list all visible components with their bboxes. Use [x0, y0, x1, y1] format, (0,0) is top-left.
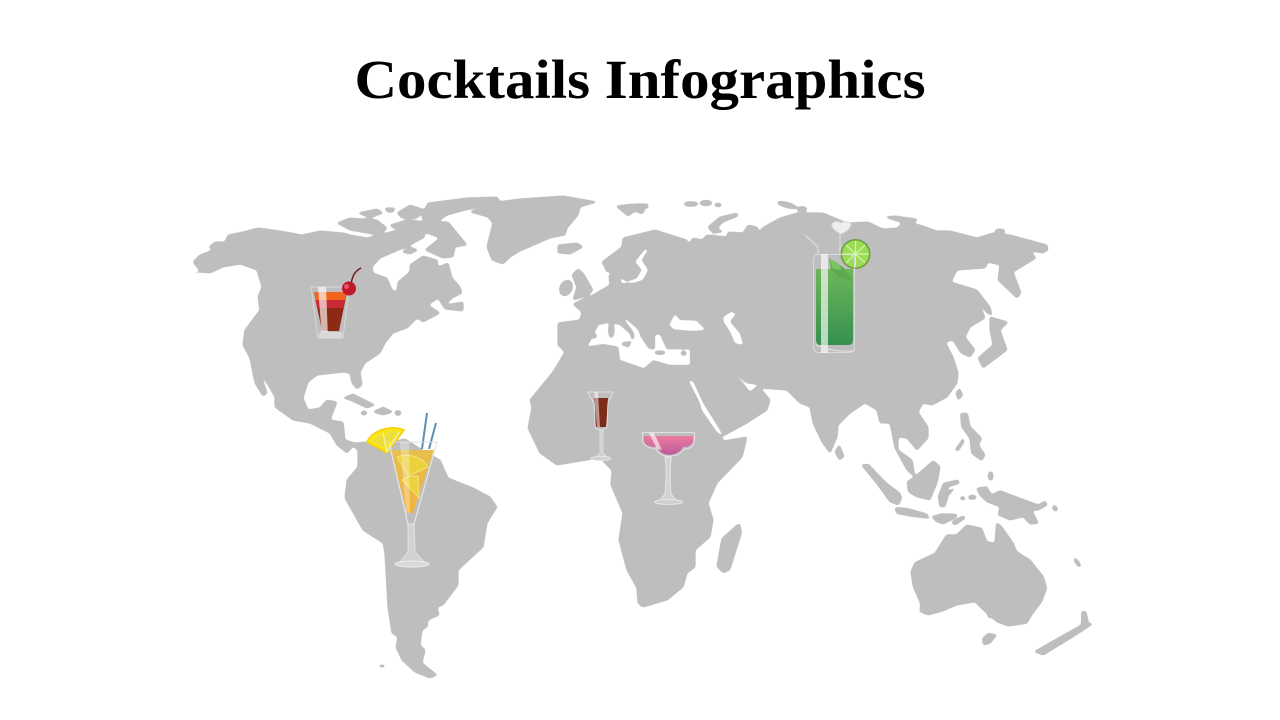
map: Madagascar — [717, 523, 742, 573]
map: Eurasia and Africa — [528, 213, 1048, 607]
map: Britain and Ireland — [557, 269, 593, 300]
icon: red cocktail with cherry — [311, 268, 361, 338]
sea: Adriatic — [624, 319, 641, 338]
map: Americas — [188, 227, 497, 678]
map: Mediterranean islands — [591, 322, 687, 356]
icon: dark red cordial glass — [588, 392, 613, 460]
sea: Baltic — [617, 249, 648, 283]
sea: Black Sea — [669, 314, 706, 331]
icon: yellow champagne cocktail with lemon — [367, 413, 437, 567]
map: Greenland — [470, 196, 597, 264]
world map — [150, 170, 1130, 700]
map: northern islands — [616, 200, 1005, 233]
sea: Red Sea — [688, 380, 723, 437]
icon: green highball with lime — [805, 222, 870, 353]
map: Caribbean islands — [343, 394, 401, 667]
map: Arctic Canada islands — [337, 197, 500, 258]
map: Iceland — [558, 243, 583, 254]
sea: Mediterranean — [572, 323, 690, 368]
icon: pink coupe glass — [642, 432, 694, 504]
map: Japan — [978, 317, 1008, 368]
map: inland seas — [572, 249, 758, 437]
map: Asia-Pacific islands and Australia — [835, 388, 1093, 655]
sea: Caspian — [723, 312, 743, 345]
title: Cocktails Infographics — [354, 49, 926, 110]
sea: Persian Gulf — [735, 373, 758, 392]
